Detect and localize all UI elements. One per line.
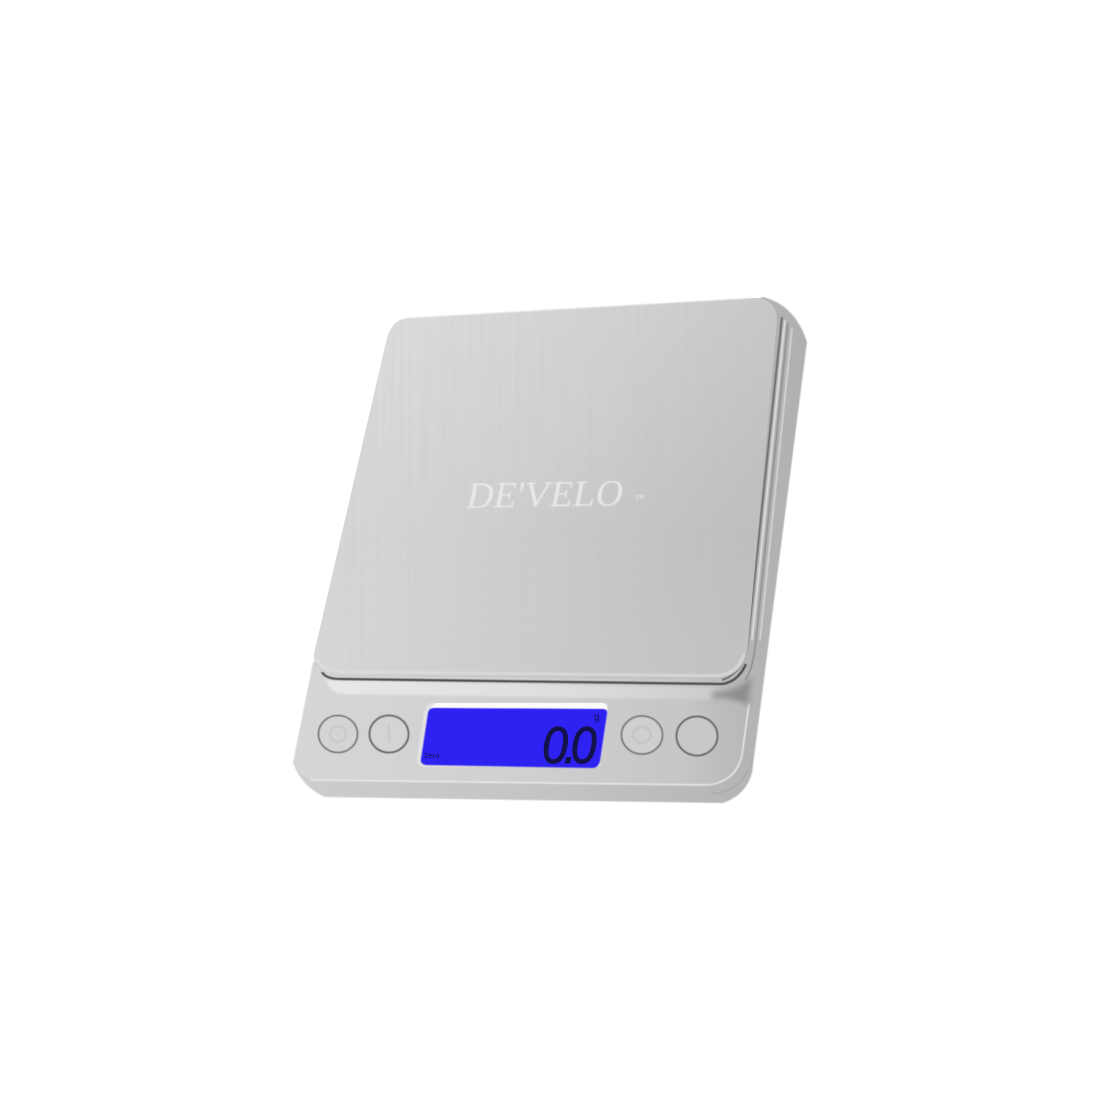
scale base body	[293, 297, 807, 803]
control button: second left	[370, 716, 408, 752]
side layers of the platter and base, right edge	[722, 317, 792, 680]
LCD display	[417, 703, 608, 775]
brand logo on platter: DE'VELO	[463, 474, 627, 517]
zero label: Zero	[424, 751, 439, 760]
control button: far left	[318, 716, 358, 752]
product illustration: digital kitchen scale	[292, 296, 808, 804]
weighing platter	[300, 290, 790, 690]
display bezel	[417, 703, 608, 767]
unit: g: g	[594, 712, 600, 723]
reading: 0.0: 0.0	[542, 717, 597, 775]
shadow under platter, right corner	[712, 676, 752, 706]
brand logo on platter: TM	[635, 495, 645, 501]
control button: second right	[622, 716, 662, 754]
display top highlight	[430, 703, 607, 709]
platter shadow line	[322, 664, 746, 684]
blue screen	[421, 708, 607, 768]
raised lip under the platter	[326, 680, 745, 700]
control button: far right	[676, 716, 718, 756]
